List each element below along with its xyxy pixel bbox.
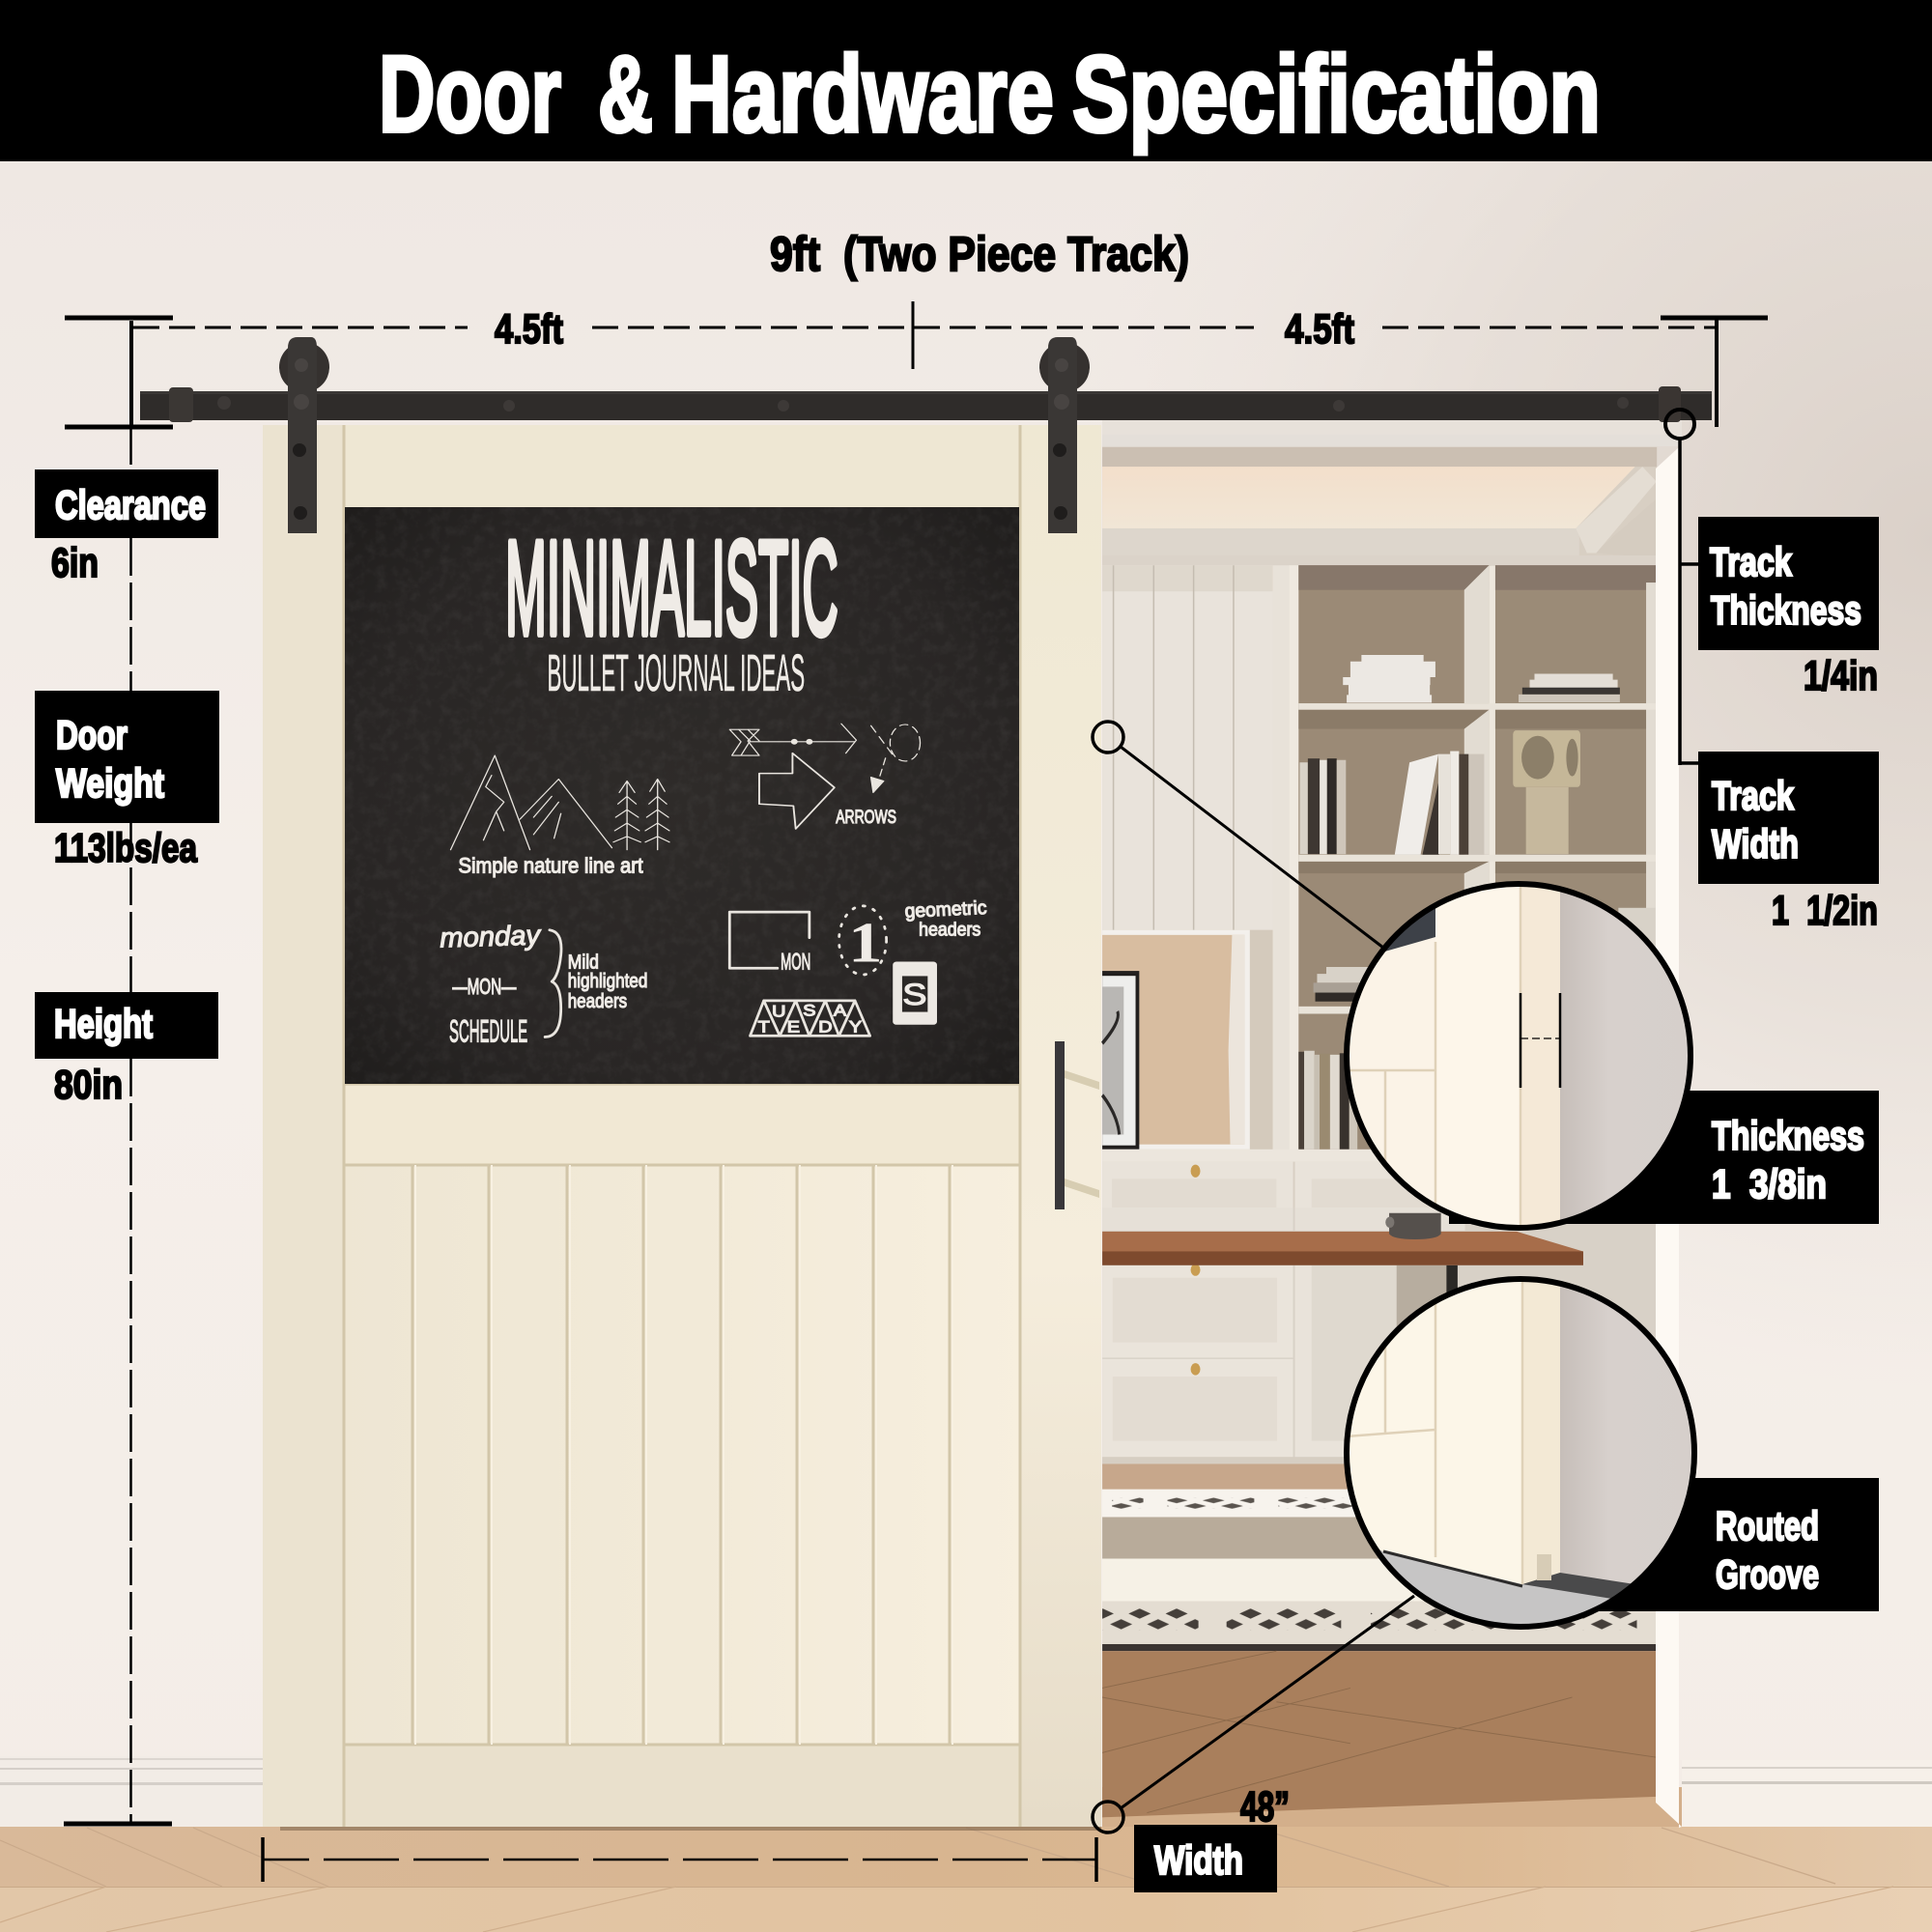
thickness label bbox=[1449, 1091, 1879, 1224]
door jamb bbox=[1102, 419, 1682, 1828]
geometric header samples: E bbox=[787, 1017, 800, 1036]
sculpture bbox=[1513, 730, 1580, 787]
left section label: 4.5ft bbox=[495, 306, 563, 353]
magnifier: routed groove detail bbox=[1343, 1275, 1710, 1642]
track width label: Width bbox=[1712, 821, 1799, 867]
sliding track rail bbox=[140, 386, 1712, 422]
left bookcase column bbox=[1298, 565, 1491, 1151]
vertical planks bbox=[344, 425, 1020, 1827]
door width dimension bbox=[263, 1783, 1290, 1892]
door weight label bbox=[35, 691, 219, 870]
left hanger bbox=[279, 337, 329, 533]
width label bbox=[1134, 1825, 1277, 1892]
track thickness label: Thickness bbox=[1711, 587, 1861, 633]
geometric header samples: geometric bbox=[904, 896, 987, 922]
track thickness label: 1/4in bbox=[1804, 653, 1878, 699]
schedule header samples: highlighted bbox=[568, 970, 647, 992]
clearance label bbox=[35, 469, 218, 586]
infographic canvas: MINIMALISTIC bbox=[505, 514, 838, 663]
framed art bbox=[1102, 930, 1250, 1150]
track width label: Track bbox=[1712, 773, 1794, 818]
bottom rail bbox=[345, 1745, 1019, 1827]
mountains doodle bbox=[450, 755, 669, 850]
door width dimension: Width bbox=[1154, 1837, 1243, 1883]
room lower part: table, drawers, rug, floor bbox=[1102, 1208, 1657, 1817]
schedule header samples: SCHEDULE bbox=[449, 1014, 527, 1049]
callout pointer to thickness detail bbox=[1093, 722, 1383, 948]
track callout connector bbox=[1665, 410, 1698, 765]
clearance label: Clearance bbox=[55, 482, 206, 527]
drawer fronts bbox=[1102, 1265, 1293, 1357]
arrow doodles bbox=[729, 724, 921, 829]
routed groove label bbox=[1478, 1478, 1879, 1611]
schedule header samples: headers bbox=[568, 990, 627, 1012]
height label: Height bbox=[54, 1001, 153, 1046]
width value: 48” bbox=[1240, 1783, 1290, 1831]
header band: Hardware bbox=[671, 34, 1054, 155]
table top bbox=[1102, 1232, 1583, 1251]
chalk drawing layer: BULLET JOURNAL IDEAS bbox=[548, 643, 805, 702]
schedule header samples bbox=[440, 920, 647, 1049]
total track label: 9ft (Two Piece Track) bbox=[770, 227, 1189, 281]
height label: 80in bbox=[54, 1062, 123, 1107]
room upper part: ceiling, shelves, artwork bbox=[1102, 435, 1657, 1211]
thickness measure marks bbox=[1520, 993, 1560, 1088]
arrows caption: ARROWS bbox=[836, 808, 896, 828]
geometric header samples: MON bbox=[781, 949, 810, 975]
track bolts bbox=[217, 396, 1629, 412]
header band: Door bbox=[379, 34, 561, 155]
book stacks bbox=[1343, 655, 1435, 703]
track end stoppers bbox=[169, 387, 193, 422]
routed groove label: Groove bbox=[1716, 1551, 1819, 1597]
geometric header samples: S bbox=[803, 1001, 815, 1019]
geometric header samples bbox=[729, 896, 987, 1036]
geometric header samples: 1 bbox=[848, 912, 883, 975]
height label bbox=[35, 992, 218, 1107]
schedule header samples: Mild bbox=[568, 951, 599, 973]
geometric header samples: headers bbox=[919, 918, 980, 940]
geometric header samples: A bbox=[834, 1001, 847, 1019]
thickness label: Thickness bbox=[1712, 1113, 1864, 1158]
nature caption: Simple nature line art bbox=[458, 854, 643, 878]
bowl bbox=[1389, 1213, 1441, 1239]
callout pointer to groove detail bbox=[1093, 1596, 1414, 1833]
left height dimension bbox=[64, 321, 173, 1824]
door handle bbox=[1055, 1041, 1099, 1209]
right section label: 4.5ft bbox=[1285, 306, 1354, 353]
door weight label: 113lbs/ea bbox=[54, 825, 198, 870]
header band: & bbox=[598, 34, 653, 155]
track width label bbox=[1698, 752, 1879, 934]
header band bbox=[0, 0, 1932, 161]
geometric header samples: Y bbox=[849, 1017, 862, 1036]
routed groove label: Routed bbox=[1716, 1503, 1819, 1548]
right bookcase column bbox=[1495, 565, 1657, 1151]
geometric header samples: S bbox=[902, 978, 926, 1011]
door weight label: Door bbox=[56, 712, 128, 757]
room seen through the open doorway bbox=[1102, 435, 1657, 1817]
barn door panel bbox=[263, 425, 1101, 1827]
clearance label: 6in bbox=[51, 540, 99, 586]
geometric header samples: D bbox=[818, 1017, 833, 1036]
track length dimension bbox=[65, 227, 1768, 427]
thickness label: 1 3/8in bbox=[1712, 1161, 1827, 1207]
chalkboard bbox=[345, 507, 1019, 1084]
track width label: 1 1/2in bbox=[1772, 888, 1878, 934]
lower shelf books bbox=[1317, 967, 1375, 982]
geometric header samples: T bbox=[758, 1017, 770, 1036]
main floor bbox=[0, 1787, 1932, 1932]
track thickness label: Track bbox=[1710, 539, 1792, 584]
magnifier: door thickness detail bbox=[1343, 869, 1700, 1236]
door weight label: Weight bbox=[56, 760, 164, 806]
lock rail bbox=[345, 1084, 1019, 1165]
cabinet top bbox=[1102, 1150, 1509, 1162]
right hanger bbox=[1039, 337, 1090, 533]
track thickness label bbox=[1698, 517, 1879, 699]
rug and floor bbox=[1102, 1463, 1398, 1490]
header band: Specification bbox=[1072, 34, 1601, 155]
schedule header samples: monday bbox=[440, 920, 543, 953]
geometric header samples: U bbox=[772, 1002, 785, 1020]
top rail bbox=[345, 425, 1019, 507]
schedule header samples: —MON— bbox=[452, 975, 517, 999]
chalk drawing layer bbox=[440, 514, 987, 1049]
